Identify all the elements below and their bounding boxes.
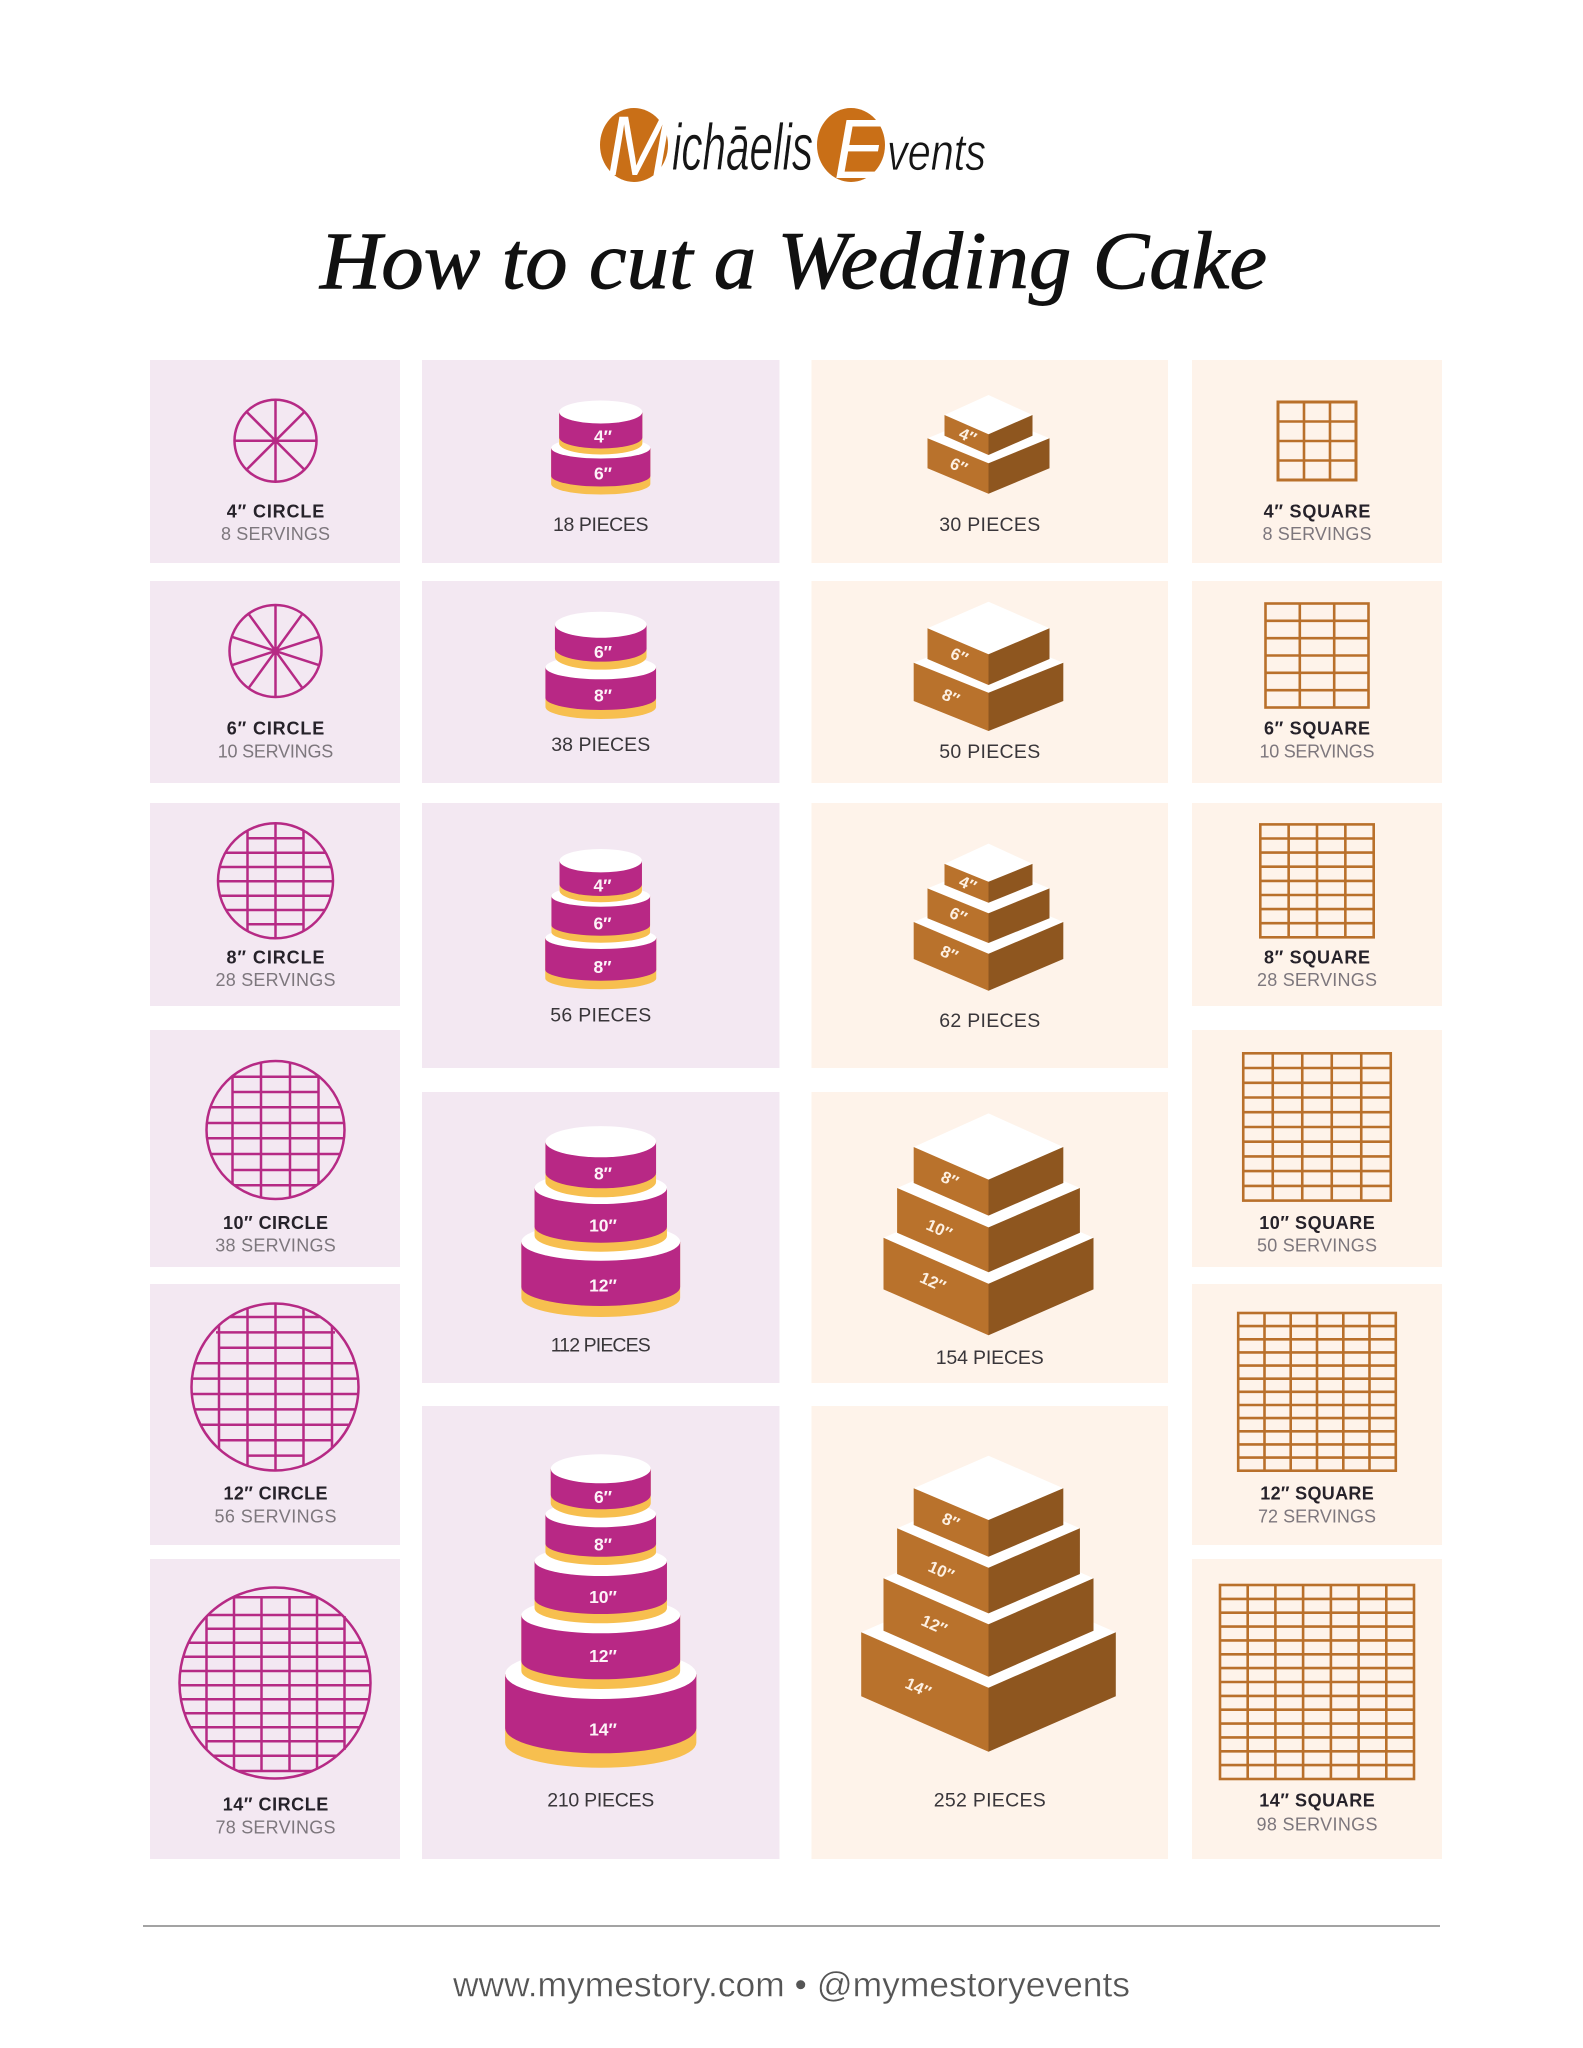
icon: 12 inch circle cut diagram: [192, 1304, 359, 1470]
icon: three tier square cake 8, 10 and 12 inch: 10″: [923, 1216, 955, 1243]
panel: 4 inch square: [1192, 360, 1442, 563]
icon: two tier round cake 6 and 8 inch: [545, 612, 656, 719]
panel: 4 inch circle: [150, 360, 400, 563]
icon: three tier round cake 4, 6 and 8 inch: [545, 849, 656, 989]
panel: 10 inch circle: [150, 1030, 400, 1267]
label: 6 inch square: 6″ SQUARE: [1264, 719, 1370, 739]
icon: three tier square cake 4, 6 and 8 inch: 4″: [956, 873, 979, 896]
servings: 28: 28 SERVINGS: [216, 970, 336, 990]
label: 6 inch circle: 6″ CIRCLE: [227, 719, 324, 739]
label: 10 inch circle: 10″ CIRCLE: [223, 1213, 328, 1233]
servings: 98: 98 SERVINGS: [1256, 1815, 1378, 1835]
panel: 62 pieces square cake: [812, 803, 1168, 1068]
icon: three tier round cake 4, 6 and 8 inch: 8″: [593, 957, 612, 977]
icon: two tier square cake 4 and 6 inch: [928, 395, 1050, 494]
logo: Michaelis Events: M: [607, 99, 670, 193]
icon: four tier square cake 8 to 14 inch: 8″: [939, 1510, 962, 1533]
label: 8 inch circle: 8″ CIRCLE: [226, 947, 324, 967]
icon: 8 inch circle cut diagram: [218, 823, 333, 938]
icon: 4 inch square cut grid: [1278, 402, 1356, 480]
icon: 6 inch circle cut diagram: [230, 605, 322, 697]
icon: three tier round cake 8, 10 and 12 inch: 10″: [589, 1215, 618, 1235]
label: 14 inch square: 14″ SQUARE: [1259, 1790, 1375, 1810]
icon: five tier round cake 6 to 14 inch: 14″: [589, 1719, 618, 1739]
panel: 56 pieces round cake: [422, 803, 780, 1068]
servings: 50: 50 SERVINGS: [1257, 1236, 1377, 1256]
panel: 18 pieces round cake: [422, 360, 780, 563]
label: 50 pieces: 50 PIECES: [939, 741, 1040, 763]
icon: two tier round cake 4 and 6 inch: 6″: [594, 464, 613, 484]
label: 112 pieces: 112 PIECES: [551, 1334, 651, 1356]
panel: 14 inch circle: [150, 1559, 400, 1859]
panel: 38 pieces round cake: [422, 581, 780, 783]
servings: 8: 8 SERVINGS: [1262, 524, 1372, 544]
icon: three tier square cake 8, 10 and 12 inch: 12″: [917, 1269, 948, 1296]
icon: two tier round cake 6 and 8 inch: 6″: [594, 642, 613, 662]
icon: three tier round cake 8, 10 and 12 inch: [521, 1126, 680, 1317]
label: 4 inch circle: 4″ CIRCLE: [227, 501, 324, 521]
icon: two tier round cake 4 and 6 inch: [551, 400, 650, 494]
label: 12 inch square: 12″ SQUARE: [1260, 1484, 1374, 1504]
servings: 72: 72 SERVINGS: [1258, 1507, 1376, 1527]
logo: Michaelis Events: vents: [887, 124, 986, 182]
icon: four tier square cake 8 to 14 inch: 12″: [918, 1612, 950, 1639]
label: 56 pieces: 56 PIECES: [550, 1004, 651, 1026]
icon: three tier round cake 8, 10 and 12 inch: 8″: [594, 1164, 613, 1184]
icon: 14 inch circle cut diagram: [180, 1588, 371, 1778]
icon: three tier square cake 4, 6 and 8 inch: 8″: [938, 942, 961, 966]
icon: 12 inch square cut grid: [1238, 1313, 1396, 1471]
icon: five tier round cake 6 to 14 inch: 12″: [589, 1646, 618, 1666]
icon: two tier square cake 4 and 6 inch: 6″: [947, 455, 970, 478]
footer: website and handle: www.mymestory.com • @mymestoryevents: [452, 1964, 1130, 2004]
icon: three tier square cake 8, 10 and 12 inch: 8″: [938, 1168, 961, 1192]
icon: 10 inch square cut grid: [1243, 1053, 1391, 1201]
servings: 10: 10 SERVINGS: [218, 741, 333, 761]
icon: two tier round cake 4 and 6 inch: 4″: [594, 426, 613, 446]
servings: 56: 56 SERVINGS: [214, 1507, 336, 1527]
icon: three tier round cake 4, 6 and 8 inch: 6″: [593, 914, 612, 934]
label: 210 pieces: 210 PIECES: [547, 1790, 654, 1812]
icon: three tier round cake 4, 6 and 8 inch: 4″: [593, 875, 612, 895]
label: 14 inch circle: 14″ CIRCLE: [223, 1795, 328, 1815]
panel: 12 inch square: [1192, 1284, 1442, 1545]
label: 12 inch circle: 12″ CIRCLE: [224, 1484, 328, 1504]
panel: 6 inch circle: [150, 581, 400, 783]
icon: three tier square cake 8, 10 and 12 inch: [884, 1113, 1094, 1335]
panel: 30 pieces square cake: [812, 360, 1168, 563]
label: 154 pieces: 154 PIECES: [936, 1347, 1044, 1369]
icon: 4 inch circle cut diagram: [234, 400, 316, 482]
icon: five tier round cake 6 to 14 inch: 6″: [594, 1487, 613, 1507]
icon: four tier square cake 8 to 14 inch: 14″: [902, 1675, 934, 1702]
servings: 78: 78 SERVINGS: [216, 1818, 336, 1838]
icon: two tier square cake 6 and 8 inch: [914, 602, 1063, 731]
label: 8 inch square: 8″ SQUARE: [1264, 947, 1370, 967]
logo: Michaelis Events: [600, 99, 986, 196]
icon: two tier round cake 6 and 8 inch: 8″: [594, 685, 613, 705]
icon: two tier square cake 6 and 8 inch: 6″: [948, 645, 971, 668]
label: 18 pieces: 18 PIECES: [553, 514, 648, 536]
panel: 10 inch square: [1192, 1030, 1442, 1267]
title: How to cut a Wedding Cake: [319, 215, 1267, 306]
servings: 8: 8 SERVINGS: [221, 524, 330, 544]
label: 62 pieces: 62 PIECES: [939, 1010, 1040, 1032]
icon: three tier square cake 4, 6 and 8 inch: 6″: [947, 904, 970, 928]
panel: 14 inch square: [1192, 1559, 1442, 1859]
icon: 14 inch square cut grid: [1220, 1585, 1414, 1779]
icon: 10 inch circle cut diagram: [206, 1061, 344, 1199]
icon: two tier square cake 4 and 6 inch: 4″: [956, 425, 979, 448]
label: 30 pieces: 30 PIECES: [939, 514, 1040, 536]
icon: five tier round cake 6 to 14 inch: 10″: [589, 1587, 618, 1607]
label: 38 pieces: 38 PIECES: [551, 734, 650, 756]
panel: 210 pieces round cake: [422, 1406, 780, 1859]
panel: 12 inch circle: [150, 1284, 400, 1545]
icon: five tier round cake 6 to 14 inch: [505, 1454, 696, 1768]
icon: four tier square cake 8 to 14 inch: [861, 1456, 1116, 1752]
icon: three tier round cake 8, 10 and 12 inch: 12″: [589, 1275, 618, 1295]
servings: 10: 10 SERVINGS: [1260, 741, 1374, 761]
panel: 112 pieces round cake: [422, 1092, 780, 1383]
panel: 6 inch square: [1192, 581, 1442, 783]
icon: 6 inch square cut grid: [1266, 604, 1368, 708]
label: 4 inch square: 4″ SQUARE: [1264, 501, 1370, 521]
servings: 38: 38 SERVINGS: [215, 1236, 336, 1256]
logo: Michaelis Events: E: [834, 102, 886, 196]
icon: four tier square cake 8 to 14 inch: 10″: [925, 1558, 957, 1585]
servings: 28: 28 SERVINGS: [1257, 970, 1377, 990]
panel: 50 pieces square cake: [812, 581, 1168, 783]
icon: three tier square cake 4, 6 and 8 inch: [914, 844, 1063, 991]
panel: 8 inch square: [1192, 803, 1442, 1006]
panel: 8 inch circle: [150, 803, 400, 1006]
icon: two tier square cake 6 and 8 inch: 8″: [939, 686, 962, 709]
icon: 8 inch square cut grid: [1260, 824, 1374, 937]
label: 10 inch square: 10″ SQUARE: [1259, 1213, 1375, 1233]
panel: 154 pieces square cake: [812, 1092, 1168, 1383]
logo: Michaelis Events: ichāelis: [672, 110, 813, 184]
panel: 252 pieces square cake: [812, 1406, 1168, 1859]
label: 252 pieces: 252 PIECES: [934, 1790, 1046, 1812]
icon: five tier round cake 6 to 14 inch: 8″: [594, 1534, 613, 1554]
